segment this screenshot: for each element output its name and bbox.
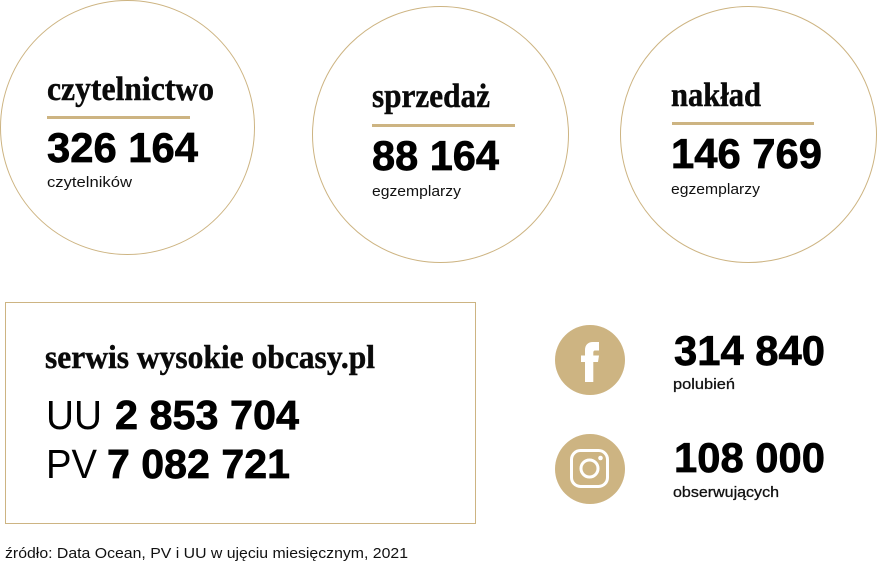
panel: sprzedaż [312, 6, 568, 262]
divider: nakład [672, 122, 814, 125]
caption: egzemplarzy: egzemplarzy [372, 183, 462, 200]
divider: czytelnictwo [47, 116, 190, 119]
metric: PV: 7 082 721 [107, 441, 290, 487]
stat: obserwujący: 108 000 [674, 434, 825, 481]
panel: nakład [620, 6, 876, 262]
number: 146 769: 146 769 [671, 130, 822, 177]
number: 326 164: 326 164 [47, 124, 199, 171]
panel: czytelnictwo [0, 0, 254, 254]
stat: obserwujący: obserwujących [673, 484, 779, 501]
icon: instagram [555, 434, 625, 504]
divider: sprzedaż [372, 124, 515, 127]
metric: PV: PV [46, 441, 98, 487]
number: 88 164: 88 164 [372, 132, 500, 179]
heading: nakład: nakład [671, 77, 761, 114]
stat: polubienia: 314 840 [674, 327, 825, 374]
heading: sprzedaż: sprzedaż [372, 78, 490, 115]
stat: polubienia: polubień [673, 376, 735, 393]
heading: czytelnictwo: czytelnictwo [47, 71, 214, 108]
panel: serwis wysokie obcasy.pl [6, 302, 476, 524]
heading: serwis: serwis wysokie obcasy.pl [45, 340, 375, 376]
source note: źródło: Data Ocean, PV i UU w ujęciu miesięcznym, 2021 [5, 545, 408, 562]
stat: obserwujący [673, 434, 825, 501]
caption: egzemplarzy: egzemplarzy [671, 181, 761, 198]
metric: UU: 2 853 704 [115, 392, 299, 438]
metric: UU: UU [46, 392, 102, 438]
icon: facebook [555, 325, 625, 395]
caption: czytelników: czytelników [47, 174, 132, 191]
